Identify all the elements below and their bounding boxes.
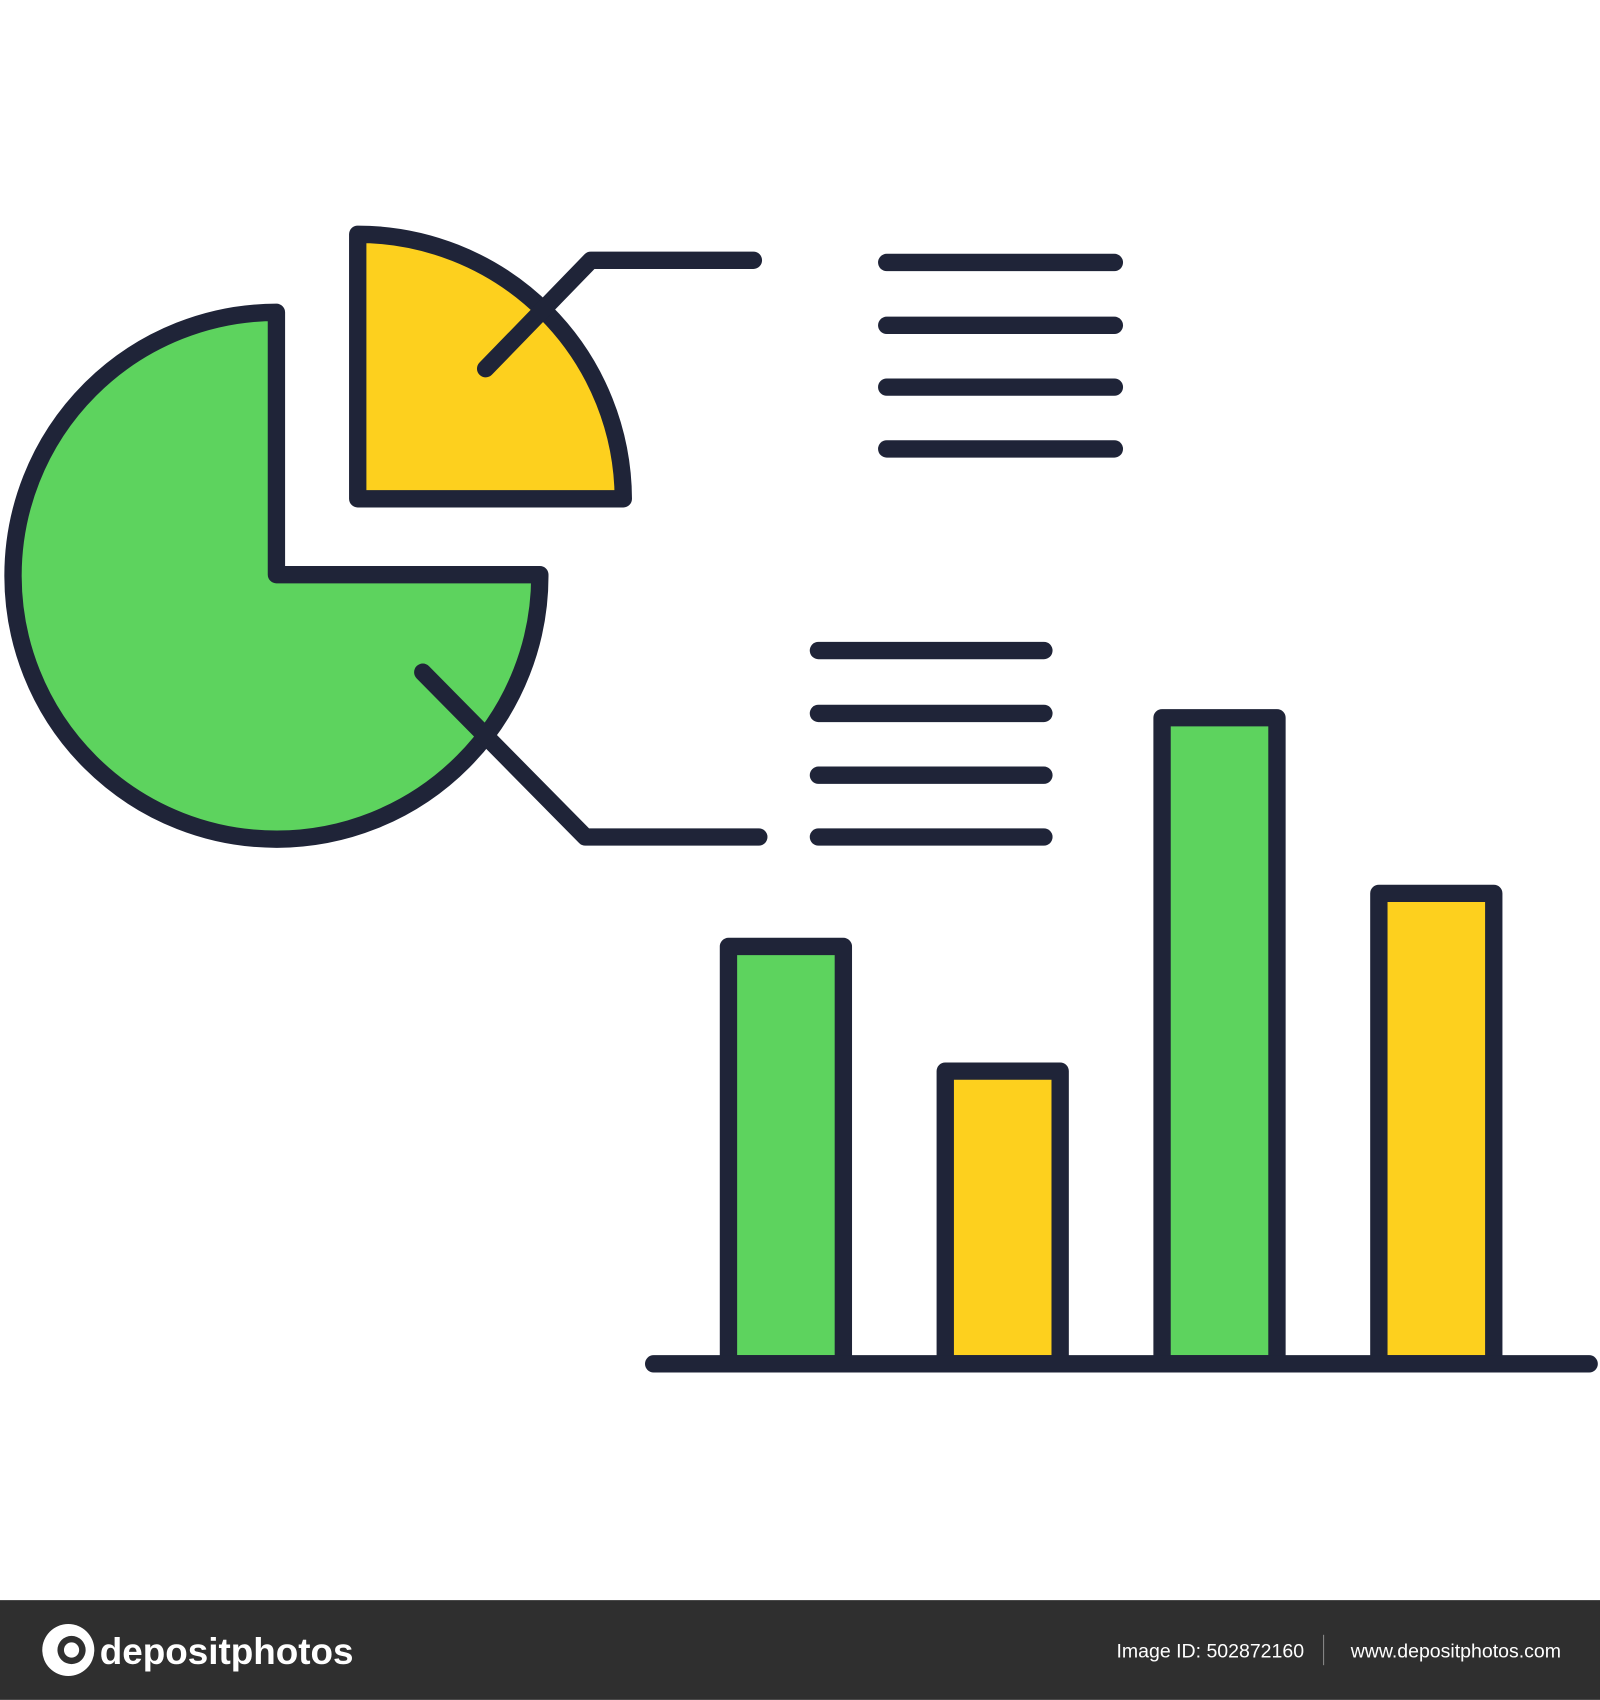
footer bar [0, 1600, 1600, 1700]
pie chart: yellow exploded slice [358, 234, 623, 499]
leader line from yellow slice [486, 260, 753, 369]
footer url: www.depositphotos.com [1350, 1641, 1561, 1663]
footer brand text: depositphotos [100, 1631, 354, 1672]
footer image id: Image ID: 502872160 [1117, 1641, 1304, 1663]
text lines: top legend [887, 262, 1114, 449]
text lines: bottom legend [818, 651, 1044, 837]
bar chart [654, 718, 1589, 1364]
icon: depositphotos logo [42, 1624, 94, 1676]
leader line from green slice [423, 672, 759, 837]
pie chart: green main slice [13, 312, 540, 839]
